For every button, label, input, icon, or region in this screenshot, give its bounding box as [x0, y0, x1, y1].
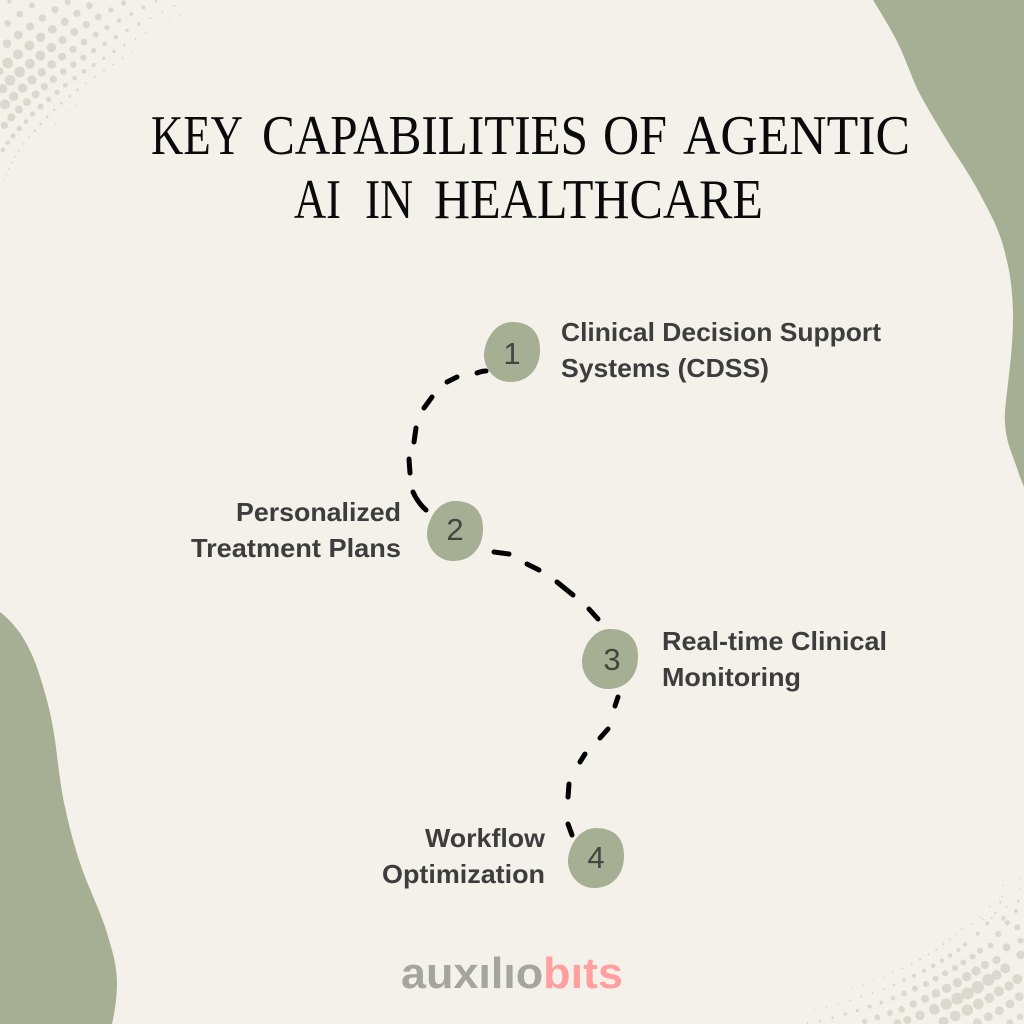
step 4 label: Optimization	[382, 859, 545, 889]
title: OF	[603, 105, 667, 167]
step 2 number: 2	[446, 512, 464, 547]
step 2	[191, 497, 483, 563]
blob: bottom left	[0, 612, 117, 1024]
step 4 label	[382, 823, 546, 889]
title	[151, 105, 910, 231]
title: AGENTIC	[683, 105, 910, 167]
logo: auxılıobıts	[401, 949, 623, 998]
step 4 label: Workflow	[425, 823, 546, 853]
step 1	[484, 317, 881, 383]
step 2 badge	[427, 501, 483, 561]
step 2 label: Treatment Plans	[191, 533, 401, 563]
title: HEALTHCARE	[434, 169, 763, 231]
step 2 label	[191, 497, 401, 563]
step 3 label: Real-time Clinical	[662, 626, 887, 656]
title: AI	[294, 169, 341, 231]
halftone corner rows	[898, 900, 1024, 1024]
step 4 number: 4	[587, 840, 605, 875]
step 1 number: 1	[503, 336, 521, 371]
halftone dots: bottom right	[778, 869, 1024, 1024]
step 3	[582, 626, 887, 692]
step 1 badge	[484, 322, 540, 382]
step 4 badge	[568, 828, 624, 888]
title: IN	[365, 169, 413, 231]
step 3 label: Monitoring	[662, 662, 801, 692]
step 1 label: Clinical Decision Support	[561, 317, 881, 347]
step 3 badge	[582, 629, 638, 689]
step 1 label: Systems (CDSS)	[561, 353, 769, 383]
title: KEY	[151, 105, 243, 167]
step 1 label	[561, 317, 881, 383]
step 2 label: Personalized	[236, 497, 401, 527]
step 3 number: 3	[603, 642, 621, 677]
step 4	[382, 823, 624, 889]
title: CAPABILITIES	[262, 105, 588, 167]
halftone dots: top left	[0, 0, 181, 202]
dashed connector path	[409, 371, 618, 835]
step 3 label	[662, 626, 887, 692]
blob: top right	[873, 0, 1024, 487]
